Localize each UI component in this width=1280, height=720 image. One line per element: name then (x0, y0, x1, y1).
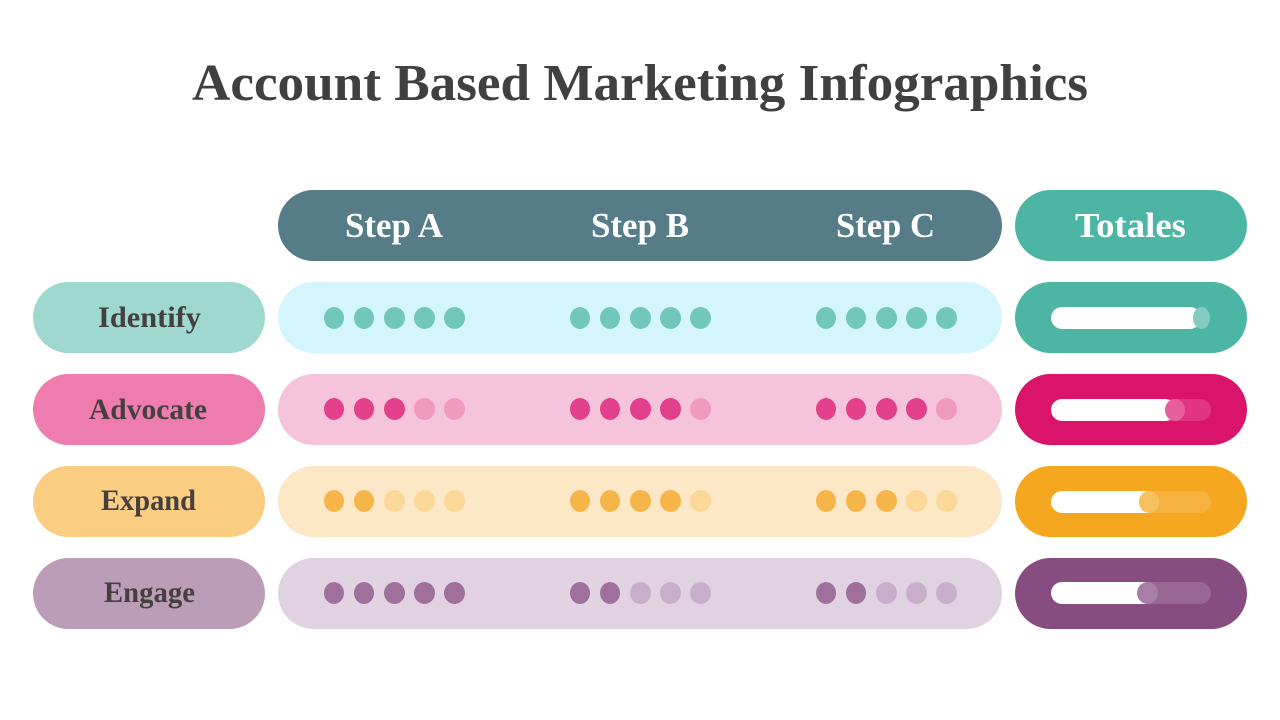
label: Advocate (33, 374, 265, 445)
total: Advocate (1015, 374, 1247, 445)
panel: Expand dots (278, 466, 1002, 537)
total: Expand (1015, 466, 1247, 537)
heading: Step B: Step B (591, 206, 689, 245)
heading: Step C: Step C (836, 206, 935, 245)
label: Identify (33, 282, 265, 353)
label: Expand: Expand (101, 484, 196, 517)
label: Expand (33, 466, 265, 537)
title: Account Based Marketing Infographics (192, 55, 1088, 112)
total: Engage (1015, 558, 1247, 629)
total: Identify (1015, 282, 1247, 353)
label: Identify: Identify (98, 301, 201, 334)
heading: Step A: Step A (345, 206, 444, 245)
panel: Advocate dots (278, 374, 1002, 445)
header: steps (278, 190, 1002, 261)
header: totales: Totales (1075, 206, 1186, 245)
row: Expand (33, 466, 1247, 537)
row: Engage (33, 558, 1247, 629)
row: Identify (33, 282, 1247, 353)
row: Advocate (33, 374, 1247, 445)
header: totales (1015, 190, 1247, 261)
label: Advocate: Advocate (89, 393, 207, 426)
label: Engage (33, 558, 265, 629)
label: Engage: Engage (104, 576, 195, 609)
panel: Engage dots (278, 558, 1002, 629)
panel: Identify dots (278, 282, 1002, 353)
